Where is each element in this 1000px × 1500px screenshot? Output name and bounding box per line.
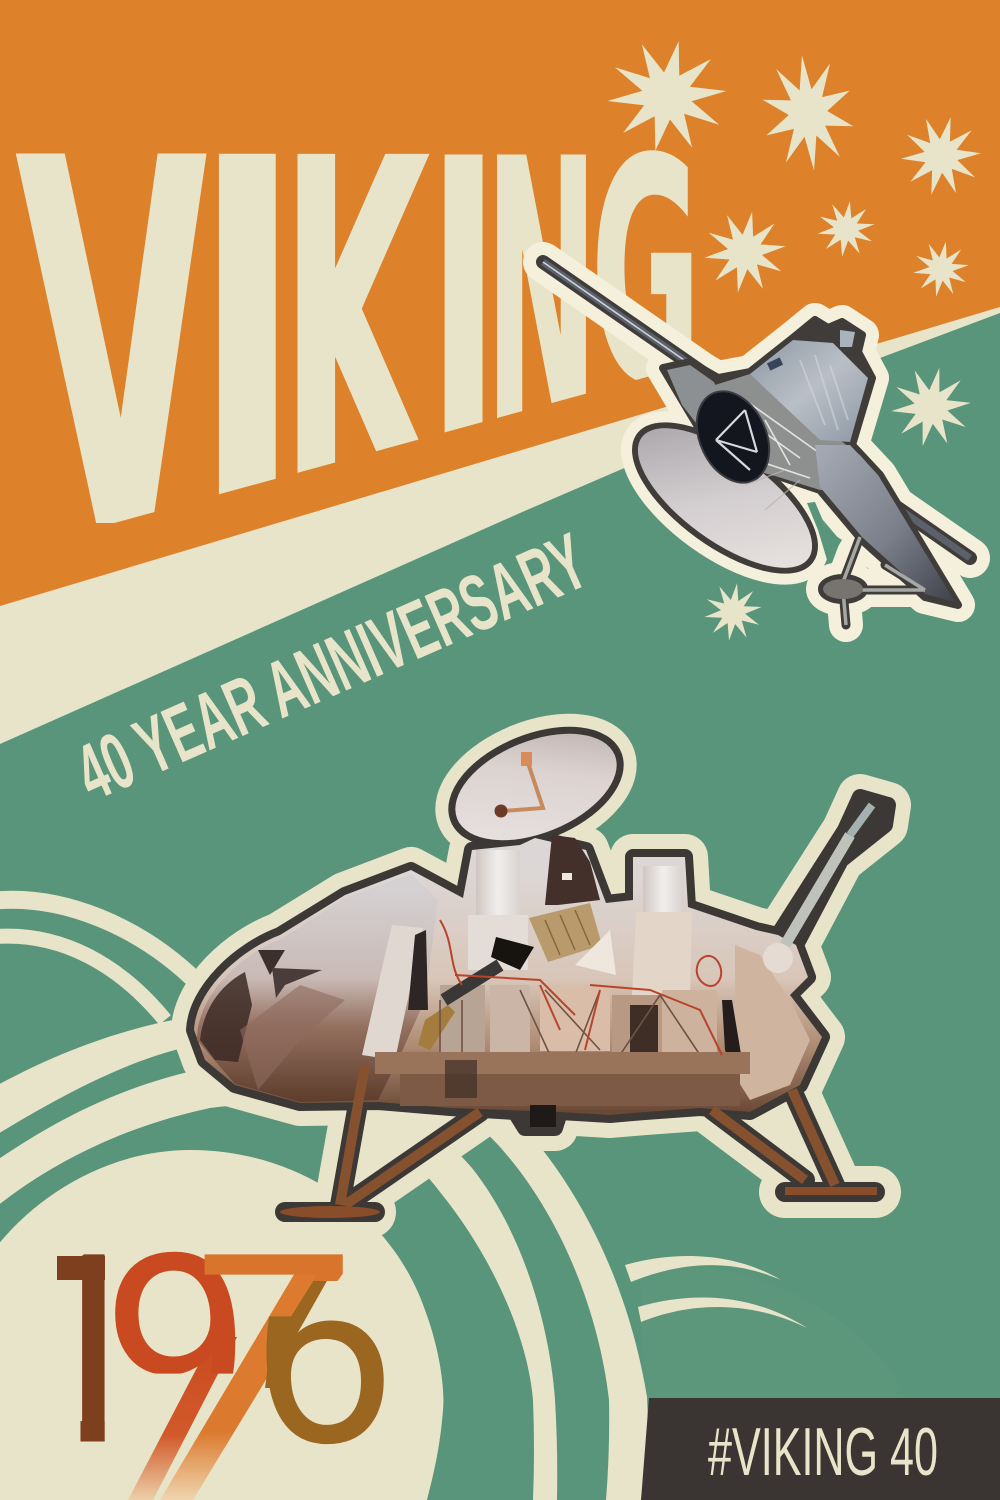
star 5	[815, 197, 877, 261]
lander dark outline	[194, 713, 888, 1212]
wisp 2	[638, 1298, 807, 1328]
title: VIKING: N	[485, 81, 598, 518]
title: VIKING: V	[13, 56, 224, 640]
background: orange sky	[0, 0, 1000, 606]
landing struts	[840, 537, 925, 625]
left foot	[280, 1206, 380, 1218]
hashtag bar	[641, 1398, 1000, 1500]
year: 1976: 6	[254, 1197, 395, 1500]
bag folds	[200, 950, 345, 1090]
star 8	[702, 579, 764, 645]
boom highlight	[543, 262, 720, 385]
star 1	[600, 29, 734, 163]
title: VIKING: G	[591, 95, 700, 450]
lattice structure lines	[440, 990, 700, 1055]
title: VIKING: K	[281, 67, 428, 584]
lander legs	[340, 1065, 835, 1205]
dish feed	[494, 752, 543, 818]
wisp 1	[625, 1256, 781, 1282]
ring 2 green	[0, 1038, 609, 1500]
dish struts	[716, 410, 757, 470]
title: VIKING	[16, 150, 692, 523]
upper left arcs	[0, 900, 200, 1020]
nozzle	[840, 330, 855, 347]
ring 4 green	[0, 1105, 534, 1500]
title: VIKING: I	[428, 79, 499, 531]
left white strut tube	[362, 925, 423, 1060]
tube 2 base	[632, 912, 692, 995]
1 flag	[57, 1256, 105, 1280]
star 7	[885, 360, 977, 454]
solar panel	[815, 445, 955, 602]
ring 1 cream	[0, 1011, 648, 1500]
tails of the 1976 digits	[57, 1256, 341, 1500]
gold box ribs	[545, 910, 590, 955]
dark mast	[545, 835, 600, 905]
concentric retro rings	[0, 900, 807, 1500]
year: 1976: 1	[18, 1197, 160, 1500]
tube 2	[643, 866, 683, 916]
gold instrument box	[529, 903, 602, 962]
tube 1 base	[468, 915, 528, 970]
centre triangle panel	[575, 930, 616, 975]
middle frame panels	[440, 985, 717, 1055]
lander left fuel bag	[197, 874, 438, 1102]
year: 1976	[80, 1252, 384, 1444]
title: VIKING: I	[194, 62, 301, 611]
ring 3 cream	[0, 1065, 557, 1500]
right dark gap	[722, 1000, 742, 1075]
year: 1976: 9	[103, 1198, 248, 1496]
lander main body	[194, 838, 822, 1115]
dark antenna dish	[683, 380, 783, 494]
sample arm barrel	[444, 965, 500, 1000]
background: cream diagonal band	[0, 290, 1000, 744]
left equipment block	[667, 365, 722, 428]
bottom dark thruster	[530, 1105, 556, 1127]
robot arm boom	[785, 805, 872, 945]
gap in halo	[807, 502, 842, 563]
ring 5 cream disc	[0, 1150, 443, 1500]
right foot	[785, 1187, 877, 1195]
tagline: 40 year anniversary: 40 YEAR ANNIVERSARY	[63, 516, 600, 818]
right wrap panel	[725, 945, 810, 1100]
red wiring	[440, 920, 722, 1055]
rib lines	[745, 470, 800, 510]
orbiter foot	[823, 579, 863, 599]
aeroshell	[616, 403, 834, 593]
equipment strip under bus	[700, 374, 880, 490]
Viking orbiter photo cut-out	[543, 262, 970, 625]
tube 1	[476, 850, 520, 920]
year: 1976: 7	[189, 1197, 358, 1500]
9 stroke	[128, 1337, 237, 1500]
flag patch	[767, 357, 783, 371]
stars	[600, 29, 988, 645]
star 2	[758, 51, 858, 175]
lander dish	[440, 713, 632, 861]
orbiter dark outline	[614, 320, 958, 625]
bus hat	[750, 340, 868, 442]
6 stem	[265, 1256, 341, 1388]
dark window strip beside tube	[408, 930, 428, 1010]
dark electronics stack	[630, 1005, 658, 1055]
star 6	[910, 237, 972, 301]
shoulder ball joint	[763, 943, 793, 973]
strip highlight lattice	[740, 400, 860, 482]
white mast tag	[562, 873, 572, 880]
7 stroke	[160, 1256, 341, 1500]
lander halo	[194, 713, 888, 1212]
star 4	[699, 205, 791, 299]
arm gold scoop	[418, 1005, 455, 1050]
deck frame	[375, 1052, 750, 1106]
faint lighter green glow	[640, 1267, 905, 1398]
boom dark sleeve	[543, 262, 970, 558]
black camera box	[491, 937, 534, 970]
orbiter halo	[543, 262, 970, 625]
hat streaks	[800, 355, 848, 430]
Viking lander photo cut-out	[194, 713, 888, 1218]
boom	[543, 262, 970, 558]
star 3	[894, 108, 988, 204]
